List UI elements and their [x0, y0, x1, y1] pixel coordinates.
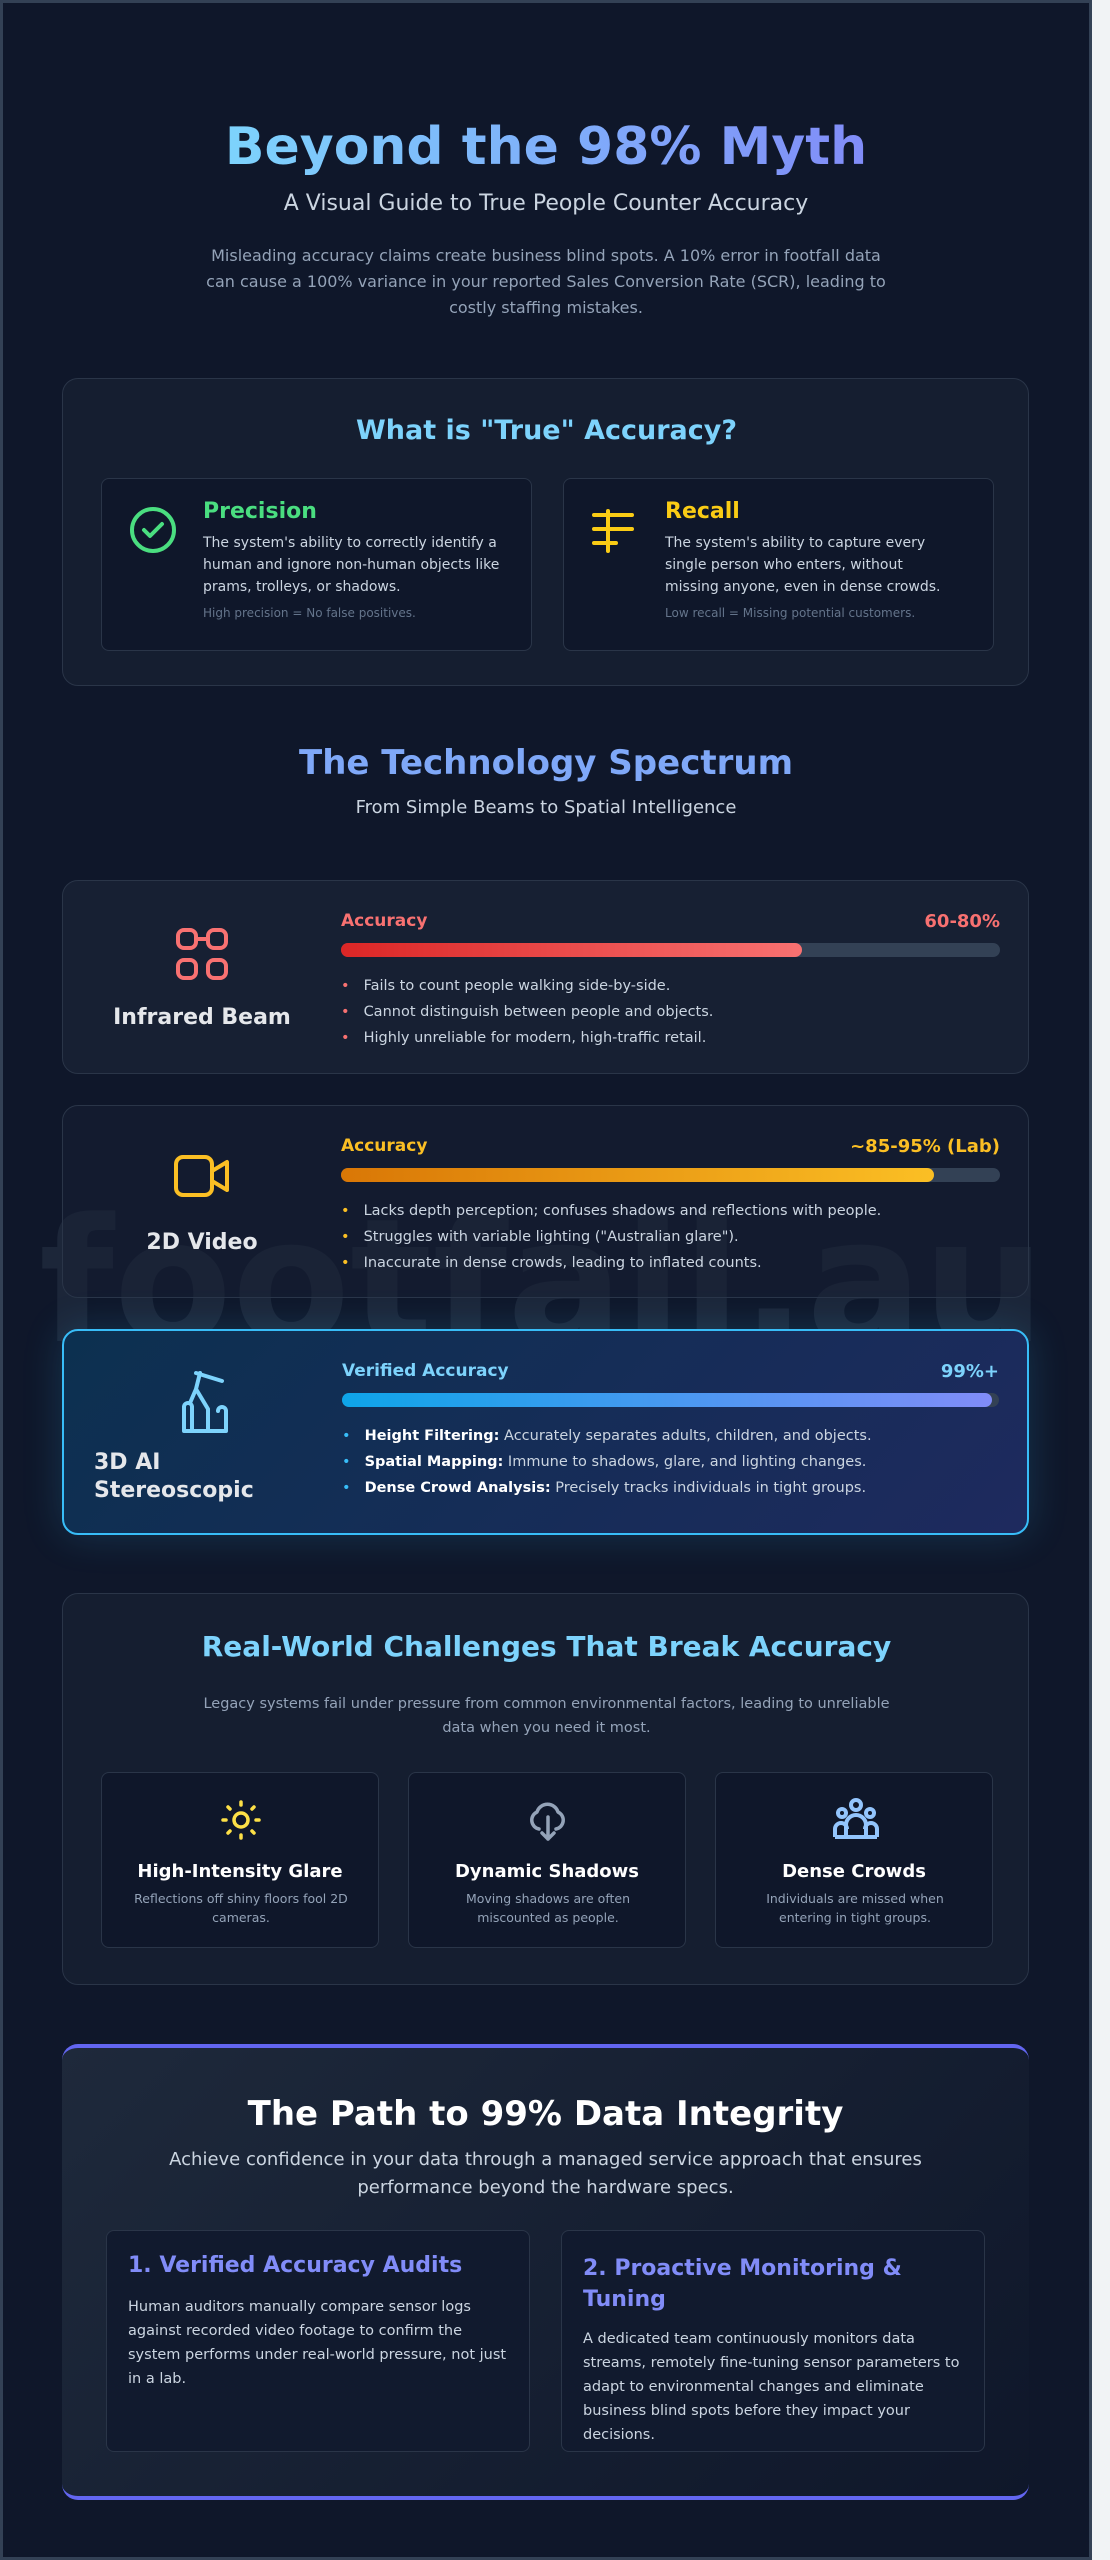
- card: infrared beam: [62, 880, 1029, 1074]
- precision text: The system's ability to correctly identify a human and ignore non-human objects like prams, trolleys, or shadows.: [203, 535, 499, 595]
- heading: The Path to 99% Data Integrity: [248, 2094, 843, 2134]
- title: Beyond the 98% Myth: [225, 117, 867, 177]
- bullets: • Height Filtering: Accurately separates adults, children, and objects.: [342, 1428, 872, 1444]
- name: 2D Video: [146, 1230, 258, 1255]
- card: crowds: [715, 1772, 993, 1948]
- recall text: The system's ability to capture every single person who enters, without missing anyone, even in dense crowds.: [665, 535, 940, 595]
- card: shadows: Moving shadows are often miscounted as people.: [466, 1891, 630, 1925]
- recall text: [664, 499, 940, 620]
- panel: path to 99%: [62, 2044, 1029, 2500]
- card: monitoring: A dedicated team continuously monitors data streams, remotely fine-tuning sensor parameters to adapt to environmental changes and eliminate business blind spots before they impact your decisions.: [583, 2331, 959, 2443]
- icon: cloud download: [530, 1802, 565, 1841]
- bar: [342, 1393, 999, 1407]
- bar: [341, 1168, 1000, 1182]
- card: 3D AI stereoscopic: 99%+: [941, 1361, 999, 1382]
- description: Achieve confidence in your data through a managed service approach that ensures performance beyond the hardware specs.: [169, 2149, 922, 2198]
- icon: check circle: [130, 507, 176, 553]
- bar: [341, 943, 1000, 957]
- name: 3D AI: [94, 1450, 160, 1475]
- icon: 3D sensor: [182, 1371, 228, 1433]
- description: Legacy systems fail under pressure from common environmental factors, leading to unreliable data when you need it most.: [203, 1696, 890, 1736]
- card: audits: [106, 2230, 530, 2452]
- card: recall: [563, 478, 994, 651]
- icon: sun: [221, 1800, 261, 1840]
- card: audits: 1. Verified Accuracy Audits: [128, 2253, 462, 2278]
- bullets: • Fails to count people walking side-by-side.: [341, 978, 670, 994]
- bullets: • Lacks depth perception; confuses shadows and reflections with people.: [341, 1203, 881, 1219]
- card: shadows: Dynamic Shadows: [455, 1861, 639, 1882]
- card: infrared beam: 60-80%: [924, 911, 1000, 932]
- bullets: [341, 978, 713, 1046]
- name: Stereoscopic: [94, 1478, 254, 1503]
- card: 2D video: ~85-95% (Lab): [850, 1136, 1000, 1157]
- precision text: High precision = No false positives.: [203, 606, 416, 620]
- bullets: • Dense Crowd Analysis: Precisely tracks individuals in tight groups.: [342, 1480, 866, 1496]
- bullets: • Inaccurate in dense crowds, leading to inflated counts.: [341, 1255, 762, 1271]
- card: crowds: Individuals are missed when entering in tight groups.: [766, 1891, 944, 1925]
- bullets: • Highly unreliable for modern, high-traffic retail.: [341, 1030, 706, 1046]
- card: monitoring: 2. Proactive Monitoring & Tuning: [583, 2256, 902, 2312]
- card: crowds: Dense Crowds: [782, 1861, 926, 1882]
- card: 3D AI stereoscopic: Verified Accuracy: [342, 1361, 509, 1381]
- card: audits: Human auditors manually compare sensor logs against recorded video footage to confirm the system performs under real-world pressure, not just in a lab.: [128, 2299, 506, 2387]
- intro paragraph: Misleading accuracy claims create business blind spots. A 10% error in footfall data can cause a 100% variance in your reported Sales Conversion Rate (SCR), leading to costly staffing mistakes.: [206, 246, 886, 317]
- icon: video: [174, 1155, 229, 1197]
- panel: true accuracy: [62, 378, 1029, 686]
- card: precision: [101, 478, 532, 651]
- card: 2D video: [62, 1105, 1029, 1298]
- bullets: [342, 1428, 872, 1496]
- subtitle: A Visual Guide to True People Counter Accuracy: [284, 191, 808, 216]
- panel: challenges: [62, 1593, 1029, 1985]
- heading: What is "True" Accuracy?: [356, 415, 737, 446]
- recall text: Low recall = Missing potential customers.: [665, 606, 915, 620]
- heading: Real-World Challenges That Break Accuracy: [202, 1630, 891, 1663]
- icon: people group: [833, 1798, 879, 1839]
- watermark: footfall.au: [39, 1181, 1045, 1382]
- card: glare: High-Intensity Glare: [137, 1861, 343, 1882]
- icon: infrared: [176, 928, 228, 980]
- bullets: • Struggles with variable lighting ("Australian glare").: [341, 1229, 739, 1245]
- bullets: [341, 1203, 881, 1271]
- card: 2D video: Accuracy: [341, 1136, 427, 1156]
- card: 3D AI stereoscopic: [62, 1329, 1029, 1535]
- subheading: From Simple Beams to Spatial Intelligence: [356, 797, 736, 818]
- icon: recall: [592, 509, 634, 553]
- recall text: Recall: [665, 499, 740, 524]
- card: glare: [101, 1772, 379, 1948]
- card: glare: Reflections off shiny floors fool 2D cameras.: [134, 1891, 348, 1925]
- name: Infrared Beam: [113, 1005, 291, 1030]
- precision text: [202, 499, 499, 620]
- precision text: Precision: [203, 499, 317, 524]
- name: [94, 1450, 254, 1503]
- bullets: • Cannot distinguish between people and objects.: [341, 1004, 713, 1020]
- heading: technology spectrum: The Technology Spectrum: [299, 743, 793, 783]
- card: shadows: [408, 1772, 686, 1948]
- bullets: • Spatial Mapping: Immune to shadows, glare, and lighting changes.: [342, 1454, 866, 1470]
- card: infrared beam: Accuracy: [341, 911, 427, 931]
- card: monitoring: [561, 2230, 985, 2452]
